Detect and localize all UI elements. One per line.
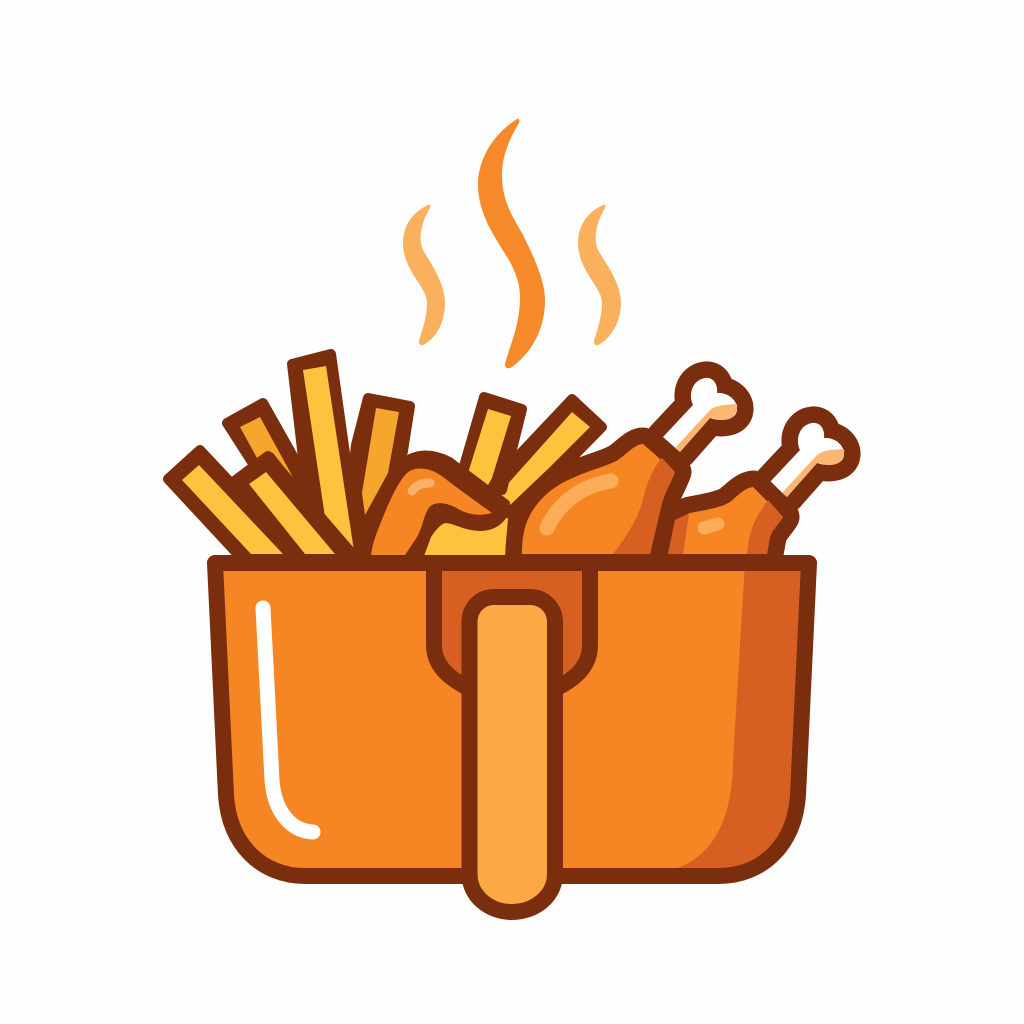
left steam wisp: [403, 205, 445, 345]
fry: front left inner: [233, 456, 362, 565]
basket: [215, 563, 815, 912]
basket handle: [470, 597, 555, 912]
fry: center back: [345, 398, 410, 540]
fry: far left: [168, 450, 305, 562]
basket outline: [215, 563, 809, 876]
food: large drumstick: [522, 378, 737, 554]
food shadow backing: [340, 500, 525, 560]
basket body: [215, 563, 809, 876]
food: yellow piece below wing: [424, 518, 508, 556]
right steam wisp: [578, 205, 621, 345]
strap panel: [434, 563, 590, 689]
illustration: basket of fried food: [163, 118, 861, 920]
meat: [668, 487, 783, 554]
bone: [770, 423, 844, 497]
fry: tall center: [292, 354, 360, 560]
meat highlight: [547, 481, 611, 528]
wing highlight: [412, 483, 430, 491]
meat: [522, 444, 675, 554]
basket side shading: [678, 571, 800, 868]
fry: right center: [460, 397, 522, 490]
food: chicken wing: [362, 454, 507, 556]
bone: [663, 378, 737, 452]
meat highlight: [704, 524, 718, 528]
icon: steam wisps: [403, 119, 621, 368]
fries: [168, 354, 602, 565]
center steam wisp: [478, 119, 545, 368]
fry: back left: [227, 403, 312, 490]
basket highlight: [263, 608, 313, 832]
food: small drumstick: [668, 423, 844, 554]
fry: far right long: [480, 399, 602, 530]
